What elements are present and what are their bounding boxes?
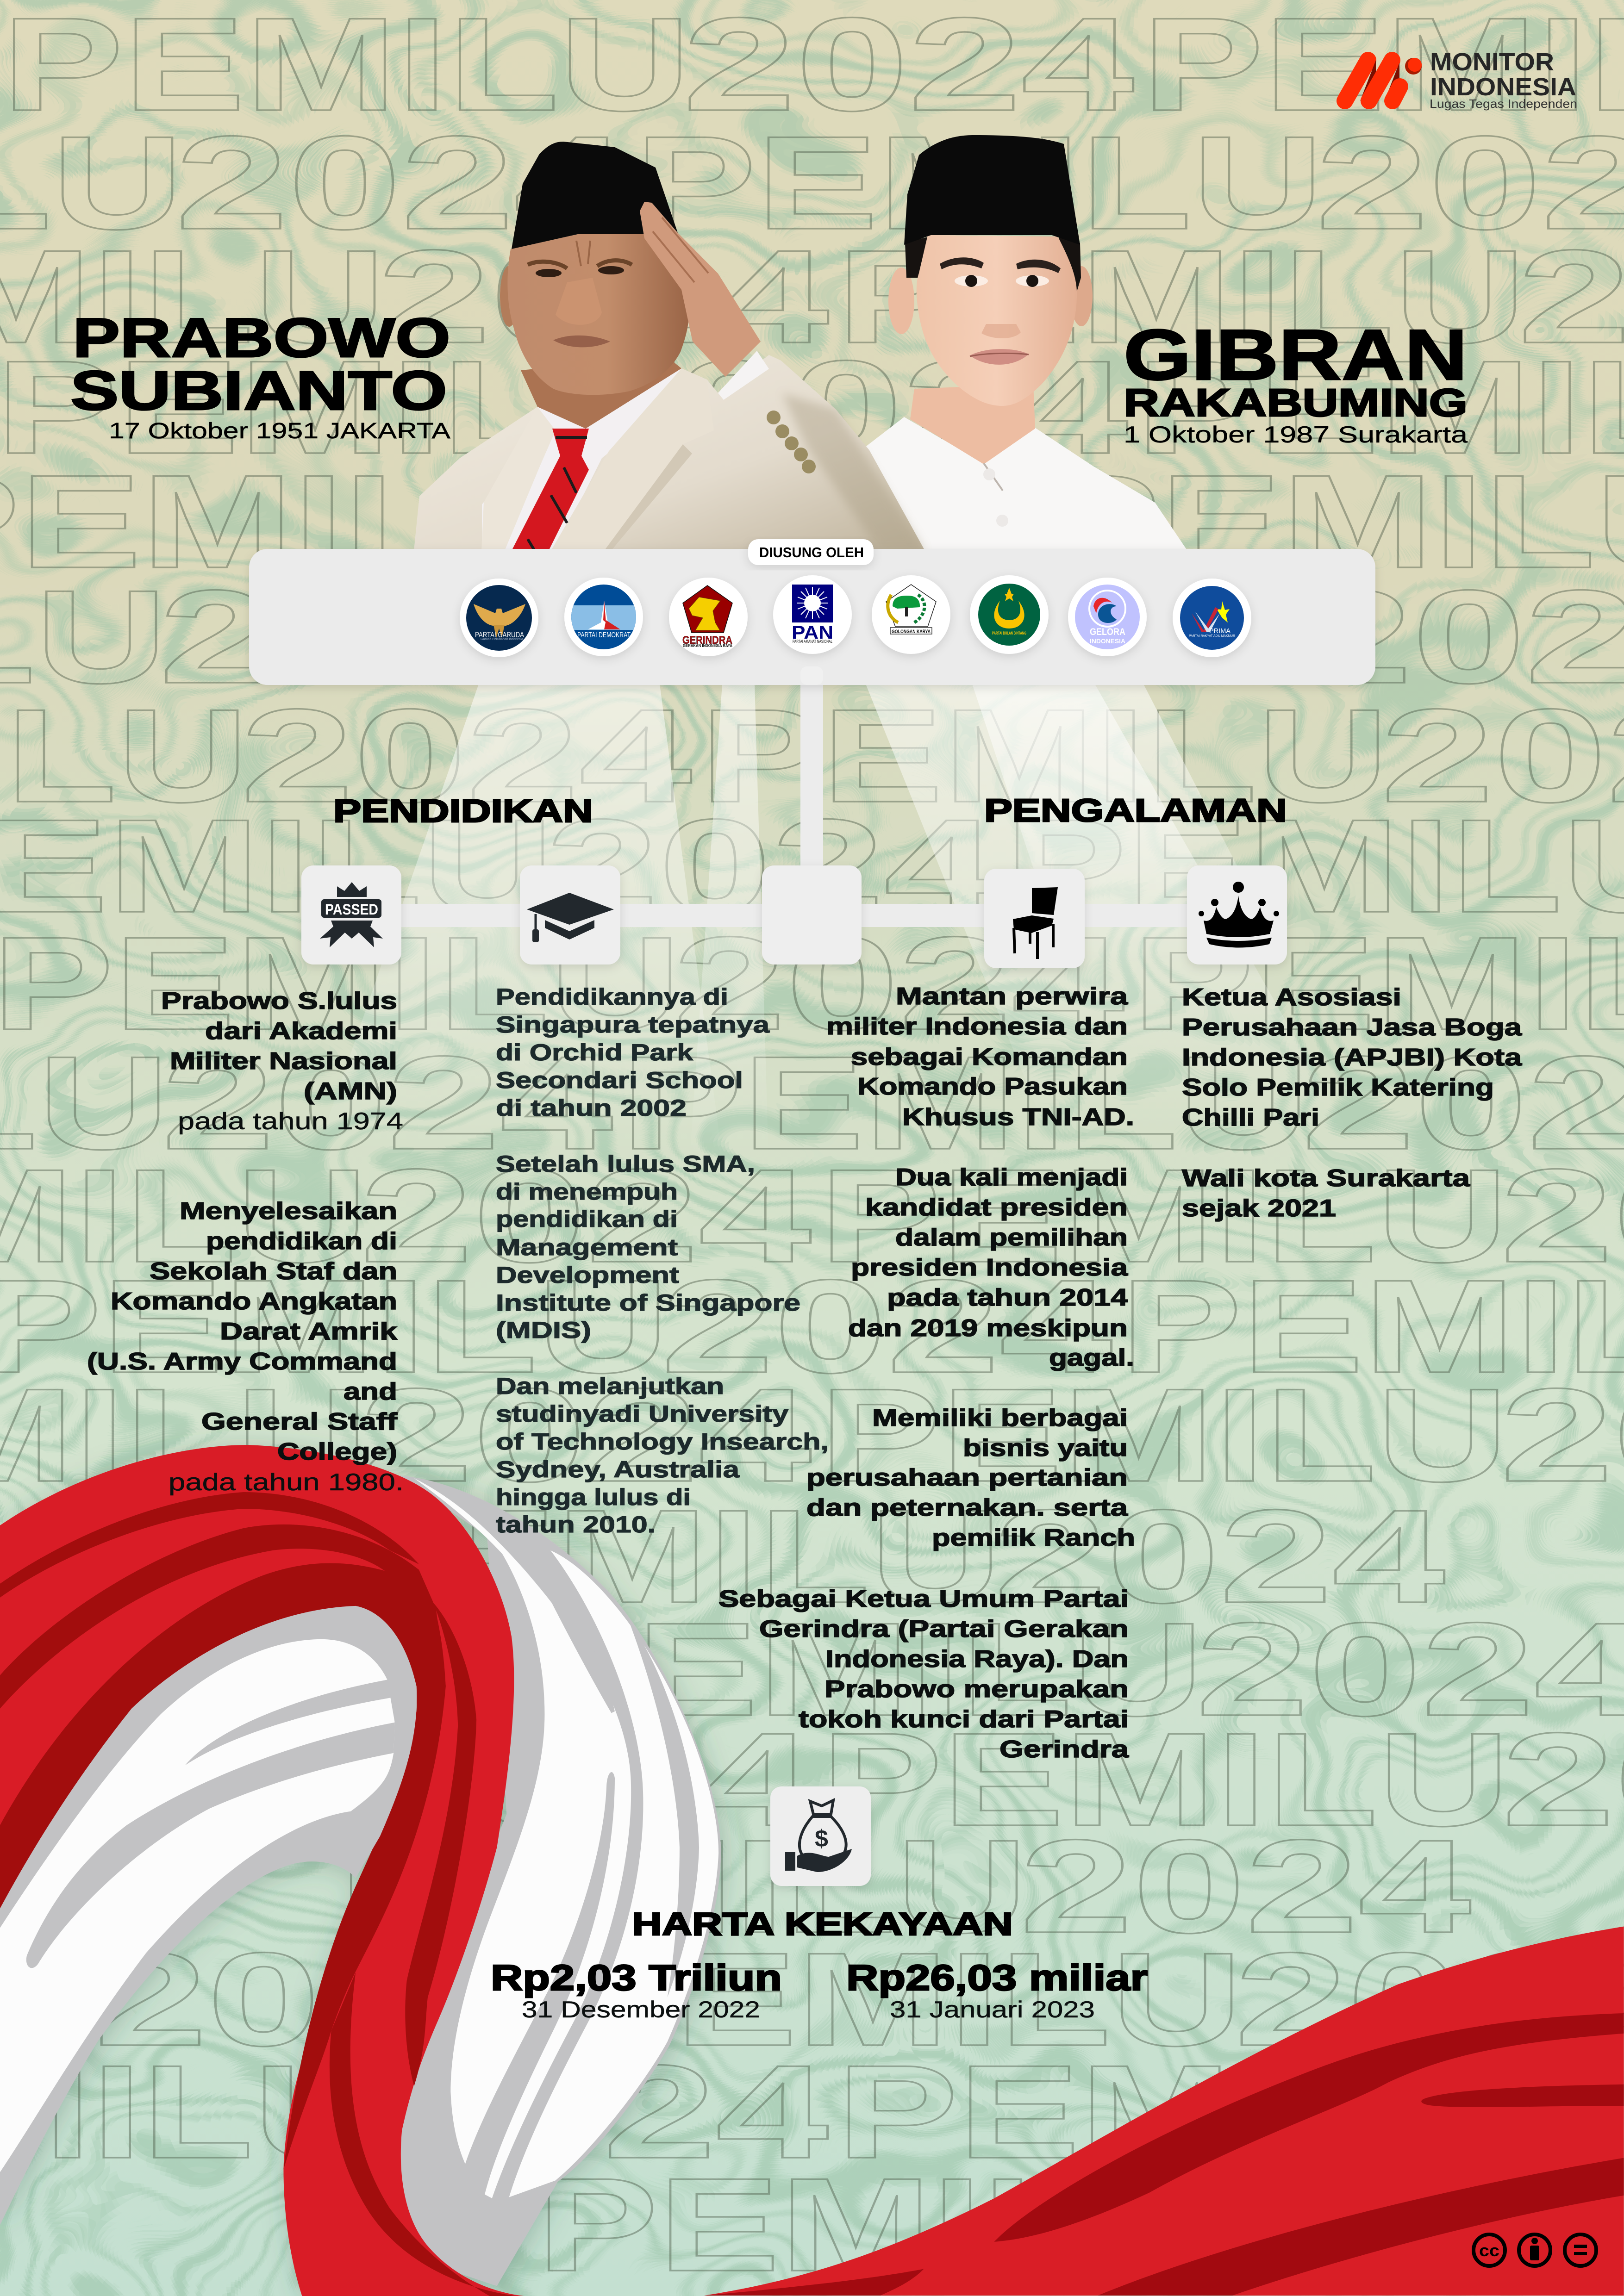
- text block: pengalaman Prabowo: dan peternakan. serta: [806, 1494, 1128, 1521]
- text block: pendidikan Gibran: of Technology Insearch,: [496, 1429, 829, 1455]
- logo: Gerindra: GERINDRA: [682, 634, 732, 647]
- text block: pengalaman Prabowo: [718, 983, 1135, 1763]
- label: diusung oleh: DIUSUNG OLEH: [759, 544, 864, 560]
- background watermark: PEMILU2024 outlined rows: 2024: [378, 222, 831, 371]
- background watermark: PEMILU2024 outlined rows: 2024: [1316, 108, 1624, 257]
- text block: pengalaman Prabowo: pemilik Ranch: [932, 1524, 1135, 1551]
- text block: pendidikan Gibran: [496, 984, 829, 1537]
- title: Gibran Rakabuming: [1124, 315, 1468, 448]
- text block: pendidikan Gibran: Pendidikannya di: [496, 984, 728, 1010]
- stat: harta Gibran: 31 Januari 2023: [890, 1997, 1095, 2022]
- text block: pengalaman Gibran: sejak 2021: [1182, 1195, 1336, 1222]
- text block: pengalaman Prabowo: militer Indonesia dan: [826, 1013, 1128, 1040]
- background watermark: PEMILU2024 outlined rows: PEMILU: [621, 1028, 1310, 1177]
- background watermark: PEMILU2024 outlined rows: PEMILU: [1136, 333, 1624, 481]
- icon tile: passed badge: [301, 865, 401, 964]
- logo: Prima: PRIMA: [1209, 627, 1230, 635]
- background watermark: PEMILU2024 outlined rows: 2024: [677, 333, 1130, 481]
- brows and eyes: [940, 257, 1061, 273]
- heading: pendidikan: PENDIDIKAN: [333, 793, 593, 829]
- background watermark: PEMILU2024 outlined rows: 2024: [159, 562, 612, 711]
- hat: [512, 142, 678, 249]
- text block: pengalaman Gibran: Chilli Pari: [1182, 1104, 1319, 1131]
- stat: harta Prabowo: [491, 1957, 782, 2022]
- text block: pendidikan Gibran: Singapura tepatnya: [496, 1012, 770, 1038]
- text block: pengalaman Prabowo: Prabowo merupakan: [824, 1676, 1129, 1703]
- text block: pendidikan Prabowo: Prabowo S.lulus: [161, 988, 397, 1014]
- logo: Prima: PARTAI RAKYAT ADIL MAKMUR: [1189, 635, 1235, 638]
- text block: pengalaman Gibran: Indonesia (APJBI) Kota: [1182, 1044, 1522, 1071]
- text block: pendidikan Prabowo: Sekolah Staf dan: [150, 1258, 397, 1285]
- text block: pengalaman Prabowo: dalam pemilihan: [895, 1224, 1128, 1251]
- text block: pendidikan Prabowo: General Staff: [201, 1408, 398, 1435]
- background watermark: PEMILU2024 outlined rows: PEMILU: [537, 2150, 1225, 2296]
- stat: harta Prabowo: Rp2,03 Triliun: [491, 1957, 782, 1998]
- icon tile: money bag: $: [815, 1825, 828, 1852]
- background watermark: PEMILU2024 outlined rows: 2024: [377, 2037, 830, 2186]
- portrait: Gibran Rakabuming: [866, 135, 1187, 551]
- text block: pengalaman Prabowo: tokoh kunci dari Partai: [799, 1706, 1129, 1733]
- hair: [905, 234, 1081, 301]
- logo: Golkar: GOLONGAN KARYA: [892, 629, 931, 635]
- logo: Prima: [1173, 579, 1251, 657]
- stat: harta Gibran: Rp26,03 miliar: [846, 1957, 1148, 1998]
- background watermark: PEMILU2024 outlined rows: PEMILU: [1132, 909, 1624, 1058]
- portrait: Prabowo Subianto: [414, 142, 925, 551]
- background watermark: PEMILU2024 outlined rows: PEMILU: [0, 333, 685, 481]
- background watermark: PEMILU2024 outlined rows: PEMILU: [700, 681, 1389, 830]
- text block: pengalaman Prabowo: bisnis yaitu: [963, 1435, 1128, 1462]
- background watermark: PEMILU2024 outlined rows: PEMILU: [837, 2037, 1525, 2186]
- background watermark: PEMILU2024 outlined rows: 2024: [1302, 1028, 1624, 1177]
- background watermark: PEMILU2024 outlined rows: PEMILU: [821, 1705, 1510, 1854]
- cuff: [718, 351, 769, 400]
- background watermark: PEMILU2024 outlined rows: PEMILU: [1120, 1252, 1624, 1400]
- text block: pengalaman Gibran: Ketua Asosiasi: [1182, 984, 1401, 1011]
- text block: pendidikan Gibran: (MDIS): [496, 1317, 591, 1343]
- text block: pengalaman Prabowo: Sebagai Ketua Umum Partai: [718, 1586, 1129, 1612]
- text block: pendidikan Gibran: pendidikan di: [496, 1206, 678, 1232]
- shirt: [482, 368, 681, 551]
- text block: pendidikan Gibran: di tahun 2002: [496, 1095, 687, 1121]
- background watermark: PEMILU2024 outlined rows: 2024: [362, 1705, 814, 1854]
- text block: pendidikan Prabowo: College): [277, 1438, 397, 1465]
- icon: creative commons licence: [1474, 2234, 1596, 2266]
- background watermark: PEMILU2024 outlined rows: 2024: [661, 1252, 1114, 1400]
- text block: pendidikan Gibran: Development: [496, 1262, 679, 1288]
- background watermark: PEMILU2024 outlined rows: PEMILU: [0, 909, 681, 1058]
- background watermark: PEMILU2024 outlined rows: PEMILU: [1005, 791, 1624, 940]
- background watermark: PEMILU2024 outlined rows: PEMILU: [339, 1812, 1028, 1960]
- icon tile: center blank: [762, 865, 862, 964]
- logo: Monitor Indonesia: [1345, 48, 1577, 111]
- text block: pengalaman Prabowo: Dua kali menjadi: [895, 1164, 1128, 1191]
- text block: pengalaman Prabowo: presiden Indonesia: [851, 1254, 1128, 1281]
- background watermark: PEMILU2024 outlined rows: PEMILU: [819, 1361, 1508, 1509]
- sleeve shade: [782, 393, 925, 551]
- background watermark: PEMILU2024 outlined rows: 2024: [162, 1028, 614, 1177]
- logo: Gelora Indonesia: GELORA: [1090, 627, 1125, 637]
- logo: Gelora Indonesia: [1068, 578, 1147, 656]
- icon: creative commons licence: cc: [1479, 2241, 1499, 2260]
- features: [528, 261, 632, 268]
- logo: PAN: [773, 575, 852, 654]
- background watermark: PEMILU2024 outlined rows: PEMILU: [635, 108, 1324, 257]
- text block: pengalaman Prabowo: Gerindra (Partai Gerakan: [759, 1616, 1129, 1643]
- text block: pengalaman Prabowo: kandidat presiden: [865, 1194, 1128, 1221]
- text block: pendidikan Prabowo: Komando Angkatan: [111, 1288, 397, 1315]
- text block: pendidikan Gibran: Setelah lulus SMA,: [496, 1151, 755, 1177]
- logo: Monitor Indonesia: Lugas Tegas Independen: [1430, 97, 1577, 111]
- text block: pengalaman Gibran: [1182, 984, 1522, 1222]
- logo: PAN: PARTAI AMANAT NASIONAL: [793, 639, 832, 644]
- text block: pendidikan Prabowo: pada tahun 1974: [178, 1108, 403, 1135]
- logo: Partai Garuda: Garuda Perubahan Indonesia: [481, 638, 523, 641]
- stat: harta Gibran: [846, 1957, 1148, 2022]
- title: Prabowo Subianto: PRABOWO: [73, 307, 450, 369]
- panel: party coalition: [249, 539, 1375, 685]
- stat: harta Prabowo: 31 Desember 2022: [522, 1997, 760, 2022]
- hand salute: [640, 202, 761, 377]
- text block: pendidikan Prabowo: Darat Amrik: [220, 1318, 397, 1345]
- jacket: [414, 355, 925, 551]
- hat: [904, 135, 1080, 245]
- title: Gibran Rakabuming: GIBRAN: [1124, 315, 1468, 395]
- background watermark: PEMILU2024 outlined rows: 2024: [1235, 1925, 1624, 2073]
- title: Prabowo Subianto: 17 Oktober 1951 JAKARTA: [109, 419, 450, 443]
- logo: Gerindra: [669, 578, 748, 656]
- tie: [512, 429, 589, 551]
- text block: pengalaman Gibran: Wali kota Surakarta: [1182, 1165, 1470, 1192]
- text block: pendidikan Prabowo: [87, 988, 404, 1496]
- title: Prabowo Subianto: [70, 307, 450, 443]
- background watermark: PEMILU2024 outlined rows: 2024: [241, 681, 693, 830]
- logo: Partai Garuda: PARTAI GARUDA: [475, 630, 525, 639]
- background watermark: PEMILU2024 outlined rows: PEMILU: [515, 1595, 1204, 1743]
- text block: pendidikan Gibran: Secondari School: [496, 1067, 743, 1093]
- logo: Partai Bulan Bintang: [970, 575, 1049, 654]
- face: [507, 234, 689, 395]
- heading: harta kekayaan: HARTA KEKAYAAN: [632, 1906, 1013, 1942]
- text block: pengalaman Gibran: Solo Pemilik Katering: [1182, 1074, 1494, 1101]
- text block: pendidikan Prabowo: and: [344, 1378, 397, 1405]
- red and white ribbon, left: [0, 1445, 721, 2296]
- connector bars: [398, 666, 1190, 927]
- text block: pendidikan Gibran: Management: [496, 1234, 678, 1260]
- title: Prabowo Subianto: SUBIANTO: [70, 360, 447, 422]
- background watermark: PEMILU2024 outlined rows: PEMILU: [819, 1141, 1508, 1290]
- icon tile: chair: [984, 869, 1085, 968]
- text block: pendidikan Gibran: Institute of Singapore: [496, 1290, 800, 1316]
- text block: pengalaman Prabowo: Khusus TNI-AD.: [902, 1104, 1134, 1131]
- text block: pendidikan Gibran: studinyadi University: [496, 1401, 788, 1427]
- background watermark: PEMILU2024 outlined rows: 2024: [673, 909, 1126, 1058]
- neck: [521, 356, 681, 429]
- ears: [888, 268, 914, 334]
- lapels: [481, 407, 556, 551]
- logo: Partai Garuda: [460, 579, 538, 657]
- text block: pendidikan Prabowo: pendidikan di: [206, 1228, 397, 1255]
- logo: Partai Demokrat: PARTAI DEMOKRAT: [577, 631, 631, 639]
- background watermark: PEMILU2024 outlined rows: PEMILU: [313, 1482, 1002, 1630]
- icon tile: passed badge: PASSED: [325, 901, 378, 918]
- logo: Gelora Indonesia: INDONESIA: [1090, 637, 1125, 645]
- background watermark: PEMILU2024 outlined rows: 2024: [360, 1141, 813, 1290]
- text block: pendidikan Prabowo: Menyelesaikan: [180, 1198, 397, 1225]
- text block: pengalaman Prabowo: Gerindra: [999, 1736, 1129, 1763]
- background watermark: PEMILU2024 outlined rows: 2024: [94, 1925, 547, 2073]
- red ribbon, bottom right: [704, 1926, 1624, 2296]
- text block: pendidikan Prabowo: dari Akademi: [205, 1018, 397, 1045]
- neck: [910, 384, 1035, 464]
- background watermark: PEMILU2024 outlined rows: PEMILU: [554, 1925, 1243, 2073]
- buttons: [767, 411, 816, 473]
- logo: PAN: PAN: [792, 622, 833, 643]
- icon tile: graduation cap: [520, 865, 620, 964]
- background watermark: PEMILU2024 outlined rows: 2024: [994, 1482, 1447, 1630]
- text block: pengalaman Prabowo: Memiliki berbagai: [872, 1405, 1128, 1431]
- background watermark: PEMILU2024 outlined rows: PEMILU: [837, 222, 1526, 371]
- background watermark: PEMILU2024 outlined rows: 2024: [546, 791, 999, 940]
- background watermark: PEMILU2024 outlined rows: PEMILU: [618, 562, 1307, 711]
- title: Gibran Rakabuming: 1 Oktober 1987 Surakarta: [1124, 422, 1468, 448]
- text block: pendidikan Prabowo: (AMN): [304, 1078, 397, 1105]
- label: diusung oleh: [748, 539, 874, 565]
- background watermark: PEMILU2024 outlined rows: 2024: [175, 108, 628, 257]
- collar details: [984, 463, 1003, 491]
- background watermark: PEMILU2024 outlined rows: 2024: [1020, 1812, 1473, 1960]
- background watermark: PEMILU2024 outlined rows: 2024: [1196, 1595, 1624, 1743]
- text block: pendidikan Gibran: Dan melanjutkan: [496, 1373, 724, 1399]
- text block: pendidikan Gibran: tahun 2010.: [496, 1512, 656, 1537]
- logo: Gerindra: GERAKAN INDONESIA RAYA: [683, 643, 732, 648]
- logo: Golkar: [872, 575, 950, 654]
- logo: Monitor Indonesia: INDONESIA: [1430, 73, 1576, 101]
- text block: pengalaman Gibran: Perusahaan Jasa Boga: [1182, 1014, 1522, 1041]
- logo: Partai Bulan Bintang: PARTAI BULAN BINTANG: [992, 631, 1026, 635]
- text block: pengalaman Prabowo: perusahaan pertanian: [806, 1464, 1128, 1491]
- title: Gibran Rakabuming: RAKABUMING: [1124, 381, 1468, 424]
- background watermark: PEMILU2024 outlined rows: 2024: [360, 1361, 813, 1509]
- text block: pengalaman Prabowo: Komando Pasukan: [857, 1073, 1128, 1100]
- icon tile: crown: [1187, 865, 1287, 964]
- text block: pengalaman Prabowo: pada tahun 2014: [887, 1284, 1128, 1311]
- background watermark: PEMILU2024 outlined rows: 2024: [579, 447, 1032, 596]
- light beams below party panel: [315, 684, 1349, 1157]
- text block: pendidikan Prabowo: Militer Nasional: [170, 1048, 397, 1075]
- background watermark: PEMILU2024 outlined rows: 2024: [1299, 562, 1624, 711]
- logo: Monitor Indonesia: MONITOR: [1430, 48, 1554, 76]
- ear: [500, 266, 518, 327]
- text block: pendidikan Prabowo: (U.S. Army Command: [87, 1348, 397, 1375]
- text block: pendidikan Gibran: Sydney, Australia: [496, 1456, 740, 1482]
- icon tile: money bag: [770, 1786, 871, 1886]
- text block: pendidikan Prabowo: pada tahun 1980.: [169, 1469, 404, 1496]
- shirt: [866, 417, 1187, 551]
- text block: pengalaman Prabowo: Mantan perwira: [896, 983, 1128, 1010]
- text block: pengalaman Prabowo: sebagai Komandan: [851, 1044, 1128, 1070]
- text block: pengalaman Prabowo: dan 2019 meskipun: [848, 1315, 1128, 1342]
- background watermark: PEMILU2024 outlined rows: PEMILU: [1038, 447, 1624, 596]
- logo: Partai Demokrat: [564, 578, 643, 656]
- text block: pendidikan Gibran: di menempuh: [496, 1179, 678, 1205]
- text block: pengalaman Prabowo: gagal.: [1049, 1344, 1134, 1371]
- text block: pendidikan Gibran: hingga lulus di: [496, 1484, 691, 1510]
- text block: pengalaman Prabowo: Indonesia Raya). Dan: [825, 1646, 1129, 1673]
- text block: pendidikan Gibran: di Orchid Park: [496, 1039, 693, 1065]
- face: [917, 235, 1077, 406]
- heading: pengalaman: PENGALAMAN: [984, 792, 1287, 828]
